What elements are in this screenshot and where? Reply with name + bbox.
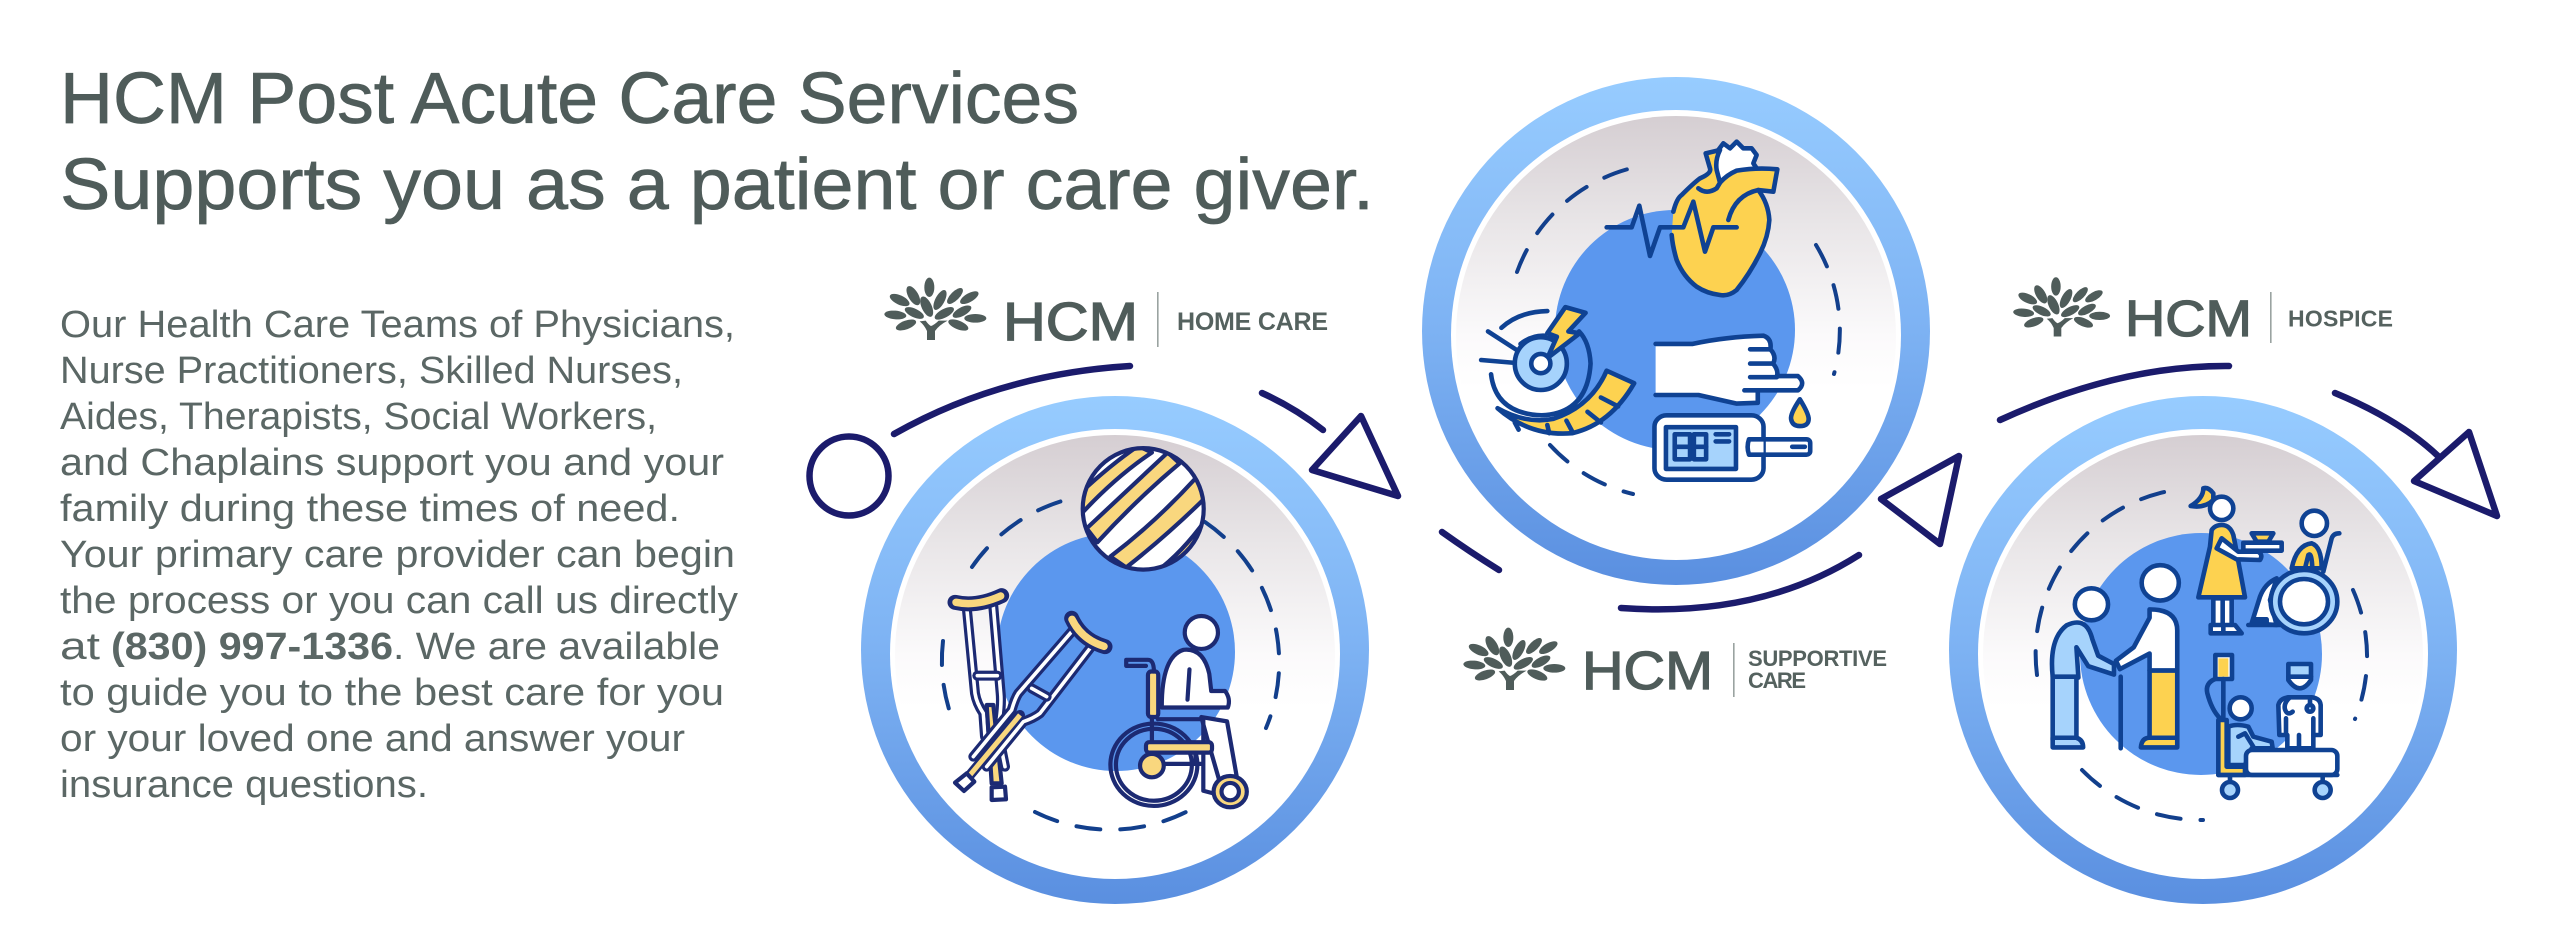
hand with blood drop — [1656, 336, 1809, 426]
title — [60, 59, 1374, 225]
logo: HCM Supportive Care: HCM — [1582, 641, 1713, 701]
logo: HCM Home Care: HCM — [1003, 292, 1138, 352]
body paragraph: the process or you can call us directly — [60, 580, 738, 622]
body paragraph: or your loved one and answer your — [60, 718, 685, 760]
icon: heart with pulse — [1607, 142, 1777, 295]
crutch leaning — [955, 618, 1105, 791]
body paragraph — [60, 304, 738, 806]
body paragraph: Aides, Therapists, Social Workers, — [60, 396, 657, 438]
dashed orbit — [942, 499, 1279, 830]
arrow: supportive care lower arc — [1442, 456, 1959, 609]
icon: start circle — [810, 436, 888, 516]
icon: nerve target, hand and glucose meter — [1481, 307, 1810, 480]
body paragraph: at — [60, 626, 101, 668]
body paragraph: . We are available — [393, 626, 720, 668]
dashed orbit — [2036, 491, 2367, 820]
arrow: home care arc — [894, 366, 1130, 434]
icon: patient in bed with IV and doctor — [2207, 655, 2337, 798]
crutch upright — [955, 596, 1006, 800]
logo: HCM Home Care — [884, 278, 1328, 352]
title: HCM Post Acute Care Services — [60, 59, 1079, 139]
body paragraph: to guide you to the best care for you — [60, 672, 724, 714]
dashed orbit — [1517, 166, 1840, 494]
icon: wheelchair and person — [1110, 616, 1247, 807]
body paragraph: Your primary care provider can begin — [60, 534, 735, 576]
arrow: home care to supportive care — [1262, 393, 1398, 496]
arrow: hospice arc — [2000, 366, 2497, 516]
body paragraph: (830) 997-1336 — [111, 626, 393, 668]
panel: home care circle — [861, 396, 1369, 904]
icon: crutches — [955, 596, 1105, 800]
nerve target with lightning — [1481, 307, 1634, 434]
title: Supports you as a patient or care giver. — [60, 145, 1374, 225]
logo: HCM Supportive Care: SUPPORTIVE — [1748, 646, 1887, 671]
logo: HCM Hospice — [2013, 277, 2393, 347]
logo: HCM Supportive Care: CARE — [1748, 668, 1806, 693]
icon: exercise ball — [1080, 446, 1206, 572]
logo: HCM Hospice: HCM — [2125, 290, 2252, 347]
body paragraph: and Chaplains support you and your — [60, 442, 724, 484]
icon: elder with cane and helper — [2052, 565, 2179, 748]
body paragraph: Our Health Care Teams of Physicians, — [60, 304, 735, 346]
logo: HCM Supportive Care — [1463, 628, 1887, 701]
body paragraph: Nurse Practitioners, Skilled Nurses, — [60, 350, 683, 392]
panel: supportive care circle — [1422, 77, 1930, 585]
panel: hospice circle — [1949, 396, 2457, 904]
body paragraph: insurance questions. — [60, 764, 428, 806]
glucose meter — [1654, 415, 1810, 480]
icon: woman serving food to wheelchair user — [2191, 488, 2339, 633]
body paragraph: family during these times of need. — [60, 488, 680, 530]
logo: HCM Hospice: HOSPICE — [2288, 306, 2393, 332]
logo: HCM Home Care: HOME CARE — [1177, 308, 1328, 336]
